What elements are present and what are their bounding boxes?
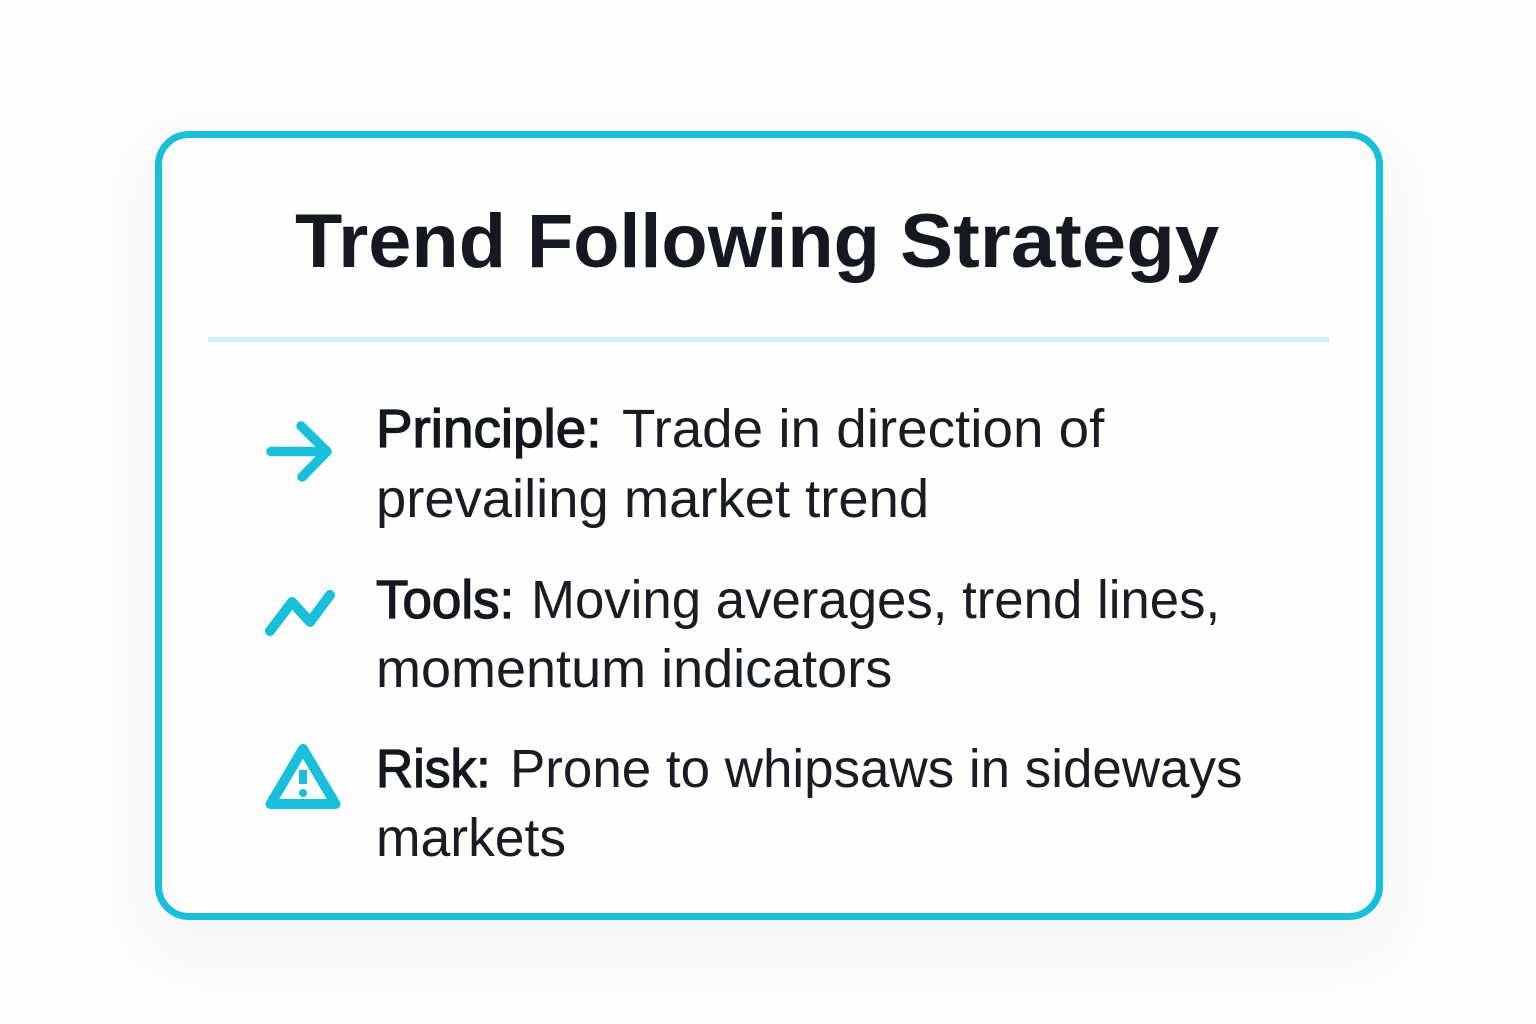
text: risk: Risk:: [376, 739, 491, 799]
icon: warning triangle: [266, 744, 340, 809]
panel: strategy card: [155, 131, 1383, 920]
title: Trend: [295, 199, 506, 284]
title: [295, 199, 1219, 284]
title: Following: [527, 199, 880, 284]
text: principle: Trade in direction of: [622, 399, 1104, 459]
icon: arrow: [266, 421, 332, 482]
title: Strategy: [900, 199, 1219, 284]
text: tools: Moving averages, trend lines,: [531, 570, 1220, 630]
text: principle: [376, 399, 1104, 459]
text: principle continued: prevailing market trend: [376, 469, 929, 529]
icon: trend line: [265, 590, 335, 636]
text: principle: Principle:: [376, 399, 601, 459]
divider under title: [208, 337, 1329, 342]
text: risk continued: markets: [376, 808, 566, 868]
text: tools: Tools:: [376, 570, 514, 630]
text: risk: Prone to whipsaws in sideways: [510, 739, 1242, 799]
text: tools continued: momentum indicators: [376, 639, 892, 699]
